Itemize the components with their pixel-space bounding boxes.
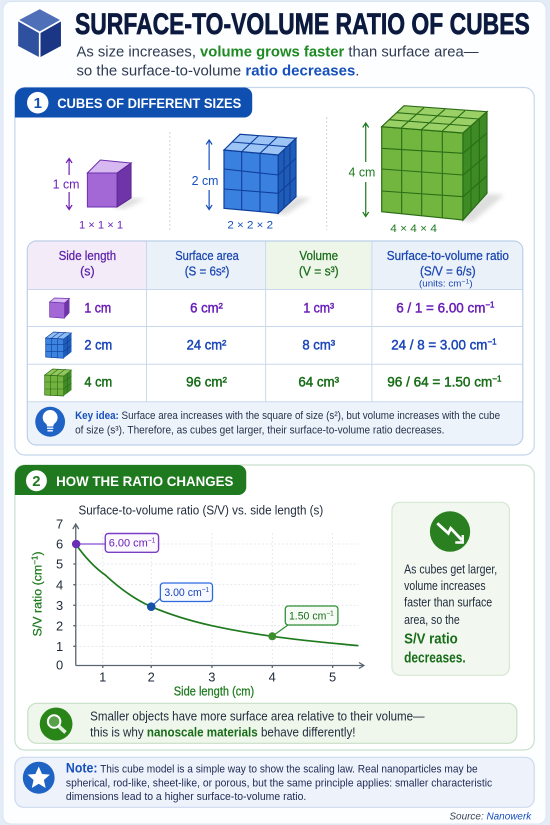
y axis numbers: 2 bbox=[56, 618, 63, 633]
2x2x2 label: 2 × 2 × 2 bbox=[227, 219, 273, 232]
note box bbox=[15, 757, 534, 807]
row: 1 cm: 1 cm bbox=[84, 300, 111, 315]
point: 6.00: 6.00 cm bbox=[109, 538, 149, 550]
2 cm dimension: 2 cm bbox=[192, 173, 218, 188]
icon: downward trend bbox=[430, 511, 470, 552]
note text bbox=[66, 760, 492, 803]
row: 4 cm: −1 bbox=[492, 375, 502, 384]
point: 1.50 bbox=[268, 606, 338, 640]
y axis label: −1 bbox=[31, 555, 40, 565]
purple cube bbox=[87, 160, 145, 209]
point: 3.00: −1 bbox=[202, 587, 209, 594]
icon: light bulb bbox=[35, 407, 65, 437]
point: 1.50: 1.50 cm bbox=[289, 610, 330, 622]
row: 1 cm bbox=[50, 298, 495, 318]
row: 1 cm: 1 cm³ bbox=[303, 300, 335, 315]
x axis numbers: 3 bbox=[208, 670, 215, 685]
y axis label: ) bbox=[31, 552, 45, 556]
4 cm dimension: 4 cm bbox=[349, 164, 375, 180]
subtitle: so the surface-to-volume ratio decreases . bbox=[76, 63, 359, 79]
point: 3.00 bbox=[147, 583, 213, 611]
header: side length: Side length bbox=[59, 249, 116, 263]
header: volume: (V = s³) bbox=[299, 265, 339, 279]
row: 1 cm: 6 / 1 = 6.00 cm bbox=[396, 300, 485, 315]
nanoscale callout bbox=[28, 703, 517, 743]
row: 4 cm: 64 cm³ bbox=[298, 375, 340, 390]
section 2 number bbox=[26, 470, 47, 491]
section 2 number: 2 bbox=[32, 473, 41, 490]
1 cm dimension bbox=[53, 158, 79, 210]
1x1x1 label: 1 × 1 × 1 bbox=[79, 220, 123, 232]
row: 4 cm: 4 cm bbox=[84, 375, 112, 390]
header: ratio bbox=[387, 249, 509, 289]
data table bbox=[27, 241, 523, 445]
panel: how the ratio changes bbox=[15, 465, 534, 750]
section 1 tab bbox=[15, 88, 252, 118]
y axis numbers: 7 bbox=[56, 517, 63, 532]
row: 2 cm bbox=[46, 332, 497, 358]
mini green cube bbox=[45, 369, 71, 396]
callout text: decreases. bbox=[404, 650, 466, 666]
source credit: Source: Nanowerk bbox=[449, 811, 532, 822]
2 cm dimension bbox=[192, 140, 218, 210]
chart title: Surface-to-volume ratio (S/V) vs. side length (s) bbox=[78, 503, 323, 517]
side callout bbox=[392, 502, 509, 675]
note text: spherical, rod-like, sheet-like, or porous, but the same principle applies: smaller characteristic bbox=[66, 778, 492, 790]
y axis numbers: 1 bbox=[56, 639, 63, 654]
x axis numbers: 2 bbox=[148, 670, 155, 685]
header: surface area bbox=[175, 249, 239, 279]
y axis numbers: 6 bbox=[56, 537, 63, 552]
4x4x4 label: 4 × 4 × 4 bbox=[390, 223, 438, 235]
row: 2 cm: 24 cm² bbox=[187, 337, 227, 352]
mini purple cube bbox=[50, 298, 70, 318]
x axis numbers: 4 bbox=[269, 670, 276, 685]
section 1 number bbox=[27, 92, 48, 113]
row: 1 cm: 6 cm² bbox=[190, 300, 223, 315]
icon: magnifier bbox=[40, 708, 72, 740]
key idea text: Key idea: Surface area increases with the square of size (s²), but volume increases with the cube bbox=[75, 410, 500, 422]
callout text bbox=[404, 562, 497, 666]
ratio curve bbox=[76, 544, 358, 646]
callout text: volume increases bbox=[404, 579, 486, 593]
row: 2 cm: 24 / 8 = 3.00 cm bbox=[391, 337, 488, 352]
x axis numbers bbox=[99, 670, 336, 685]
callout text: As cubes get larger, bbox=[404, 562, 497, 576]
x axis numbers: 1 bbox=[99, 670, 106, 685]
key idea text bbox=[75, 410, 500, 436]
blue cube bbox=[224, 134, 311, 215]
y axis numbers bbox=[56, 517, 63, 673]
callout text: Smaller objects have more surface area relative to their volume— bbox=[90, 709, 425, 724]
header: volume bbox=[299, 249, 339, 279]
header: ratio: ) bbox=[469, 279, 473, 289]
callout text: S/V ratio bbox=[404, 631, 458, 647]
header: ratio: (units: cm bbox=[419, 279, 458, 289]
y axis numbers: 3 bbox=[56, 598, 63, 613]
row: 4 cm: 96 / 64 = 1.50 cm bbox=[387, 375, 491, 390]
header cube icon bbox=[17, 8, 62, 58]
note text: Note: This cube model is a simple way to show the scaling law. Real nanoparticles may be bbox=[66, 760, 478, 776]
callout text bbox=[90, 709, 425, 739]
header: ratio: −1 bbox=[461, 279, 470, 286]
panel: cubes of different sizes bbox=[15, 88, 534, 455]
4 cm dimension bbox=[349, 123, 375, 216]
point: 6.00: −1 bbox=[148, 538, 156, 545]
point: 3.00: 3.00 cm bbox=[164, 587, 205, 599]
header: surface area: (S = 6s²) bbox=[185, 265, 229, 279]
callout text: area, so the bbox=[404, 613, 460, 627]
row: 2 cm: 2 cm bbox=[84, 337, 112, 352]
1 cm dimension: 1 cm bbox=[53, 177, 79, 192]
point: 6.00 bbox=[72, 534, 159, 552]
y axis numbers: 5 bbox=[56, 557, 63, 572]
row: 1 cm: −1 bbox=[485, 300, 495, 309]
subtitle bbox=[76, 45, 479, 79]
subtitle: As size increases, volume grows faster than surface area— bbox=[76, 45, 479, 61]
mini blue cube bbox=[46, 332, 71, 358]
green cube bbox=[382, 106, 504, 222]
section 1 number: 1 bbox=[34, 95, 42, 112]
header: side length: (s) bbox=[80, 265, 95, 279]
y axis numbers: 0 bbox=[56, 658, 63, 673]
section 2 heading: HOW THE RATIO CHANGES bbox=[56, 474, 233, 489]
header: side length bbox=[59, 249, 116, 279]
axes bbox=[73, 524, 364, 668]
row: 4 cm bbox=[45, 369, 502, 396]
point: 1.50: −1 bbox=[326, 610, 334, 617]
header: surface area: Surface area bbox=[175, 249, 239, 263]
header: ratio: Surface-to-volume ratio bbox=[387, 249, 509, 263]
note text: dimensions lead to a higher surface-to-volume ratio. bbox=[66, 791, 306, 803]
y axis numbers: 4 bbox=[56, 577, 63, 592]
row: 4 cm: 96 cm² bbox=[186, 375, 227, 390]
y axis label: S/V ratio (cm bbox=[31, 564, 45, 636]
line chart bbox=[31, 503, 364, 699]
header: ratio: (S/V = 6/s) bbox=[420, 265, 476, 279]
icon: star bbox=[23, 762, 55, 794]
row: 2 cm: −1 bbox=[487, 337, 497, 346]
x axis label: Side length (cm) bbox=[174, 685, 254, 699]
section 2 tab bbox=[15, 465, 246, 495]
x axis numbers: 5 bbox=[329, 670, 336, 685]
header: volume: Volume bbox=[299, 249, 338, 263]
callout text: faster than surface bbox=[404, 596, 492, 610]
key idea text: of size (s³). Therefore, as cubes get larger, their surface-to-volume ratio decreases. bbox=[75, 424, 444, 436]
row: 2 cm: 8 cm³ bbox=[302, 337, 336, 352]
section 1 heading: CUBES OF DIFFERENT SIZES bbox=[57, 96, 241, 111]
callout text: this is why nanoscale materials behave differently! bbox=[90, 724, 355, 739]
